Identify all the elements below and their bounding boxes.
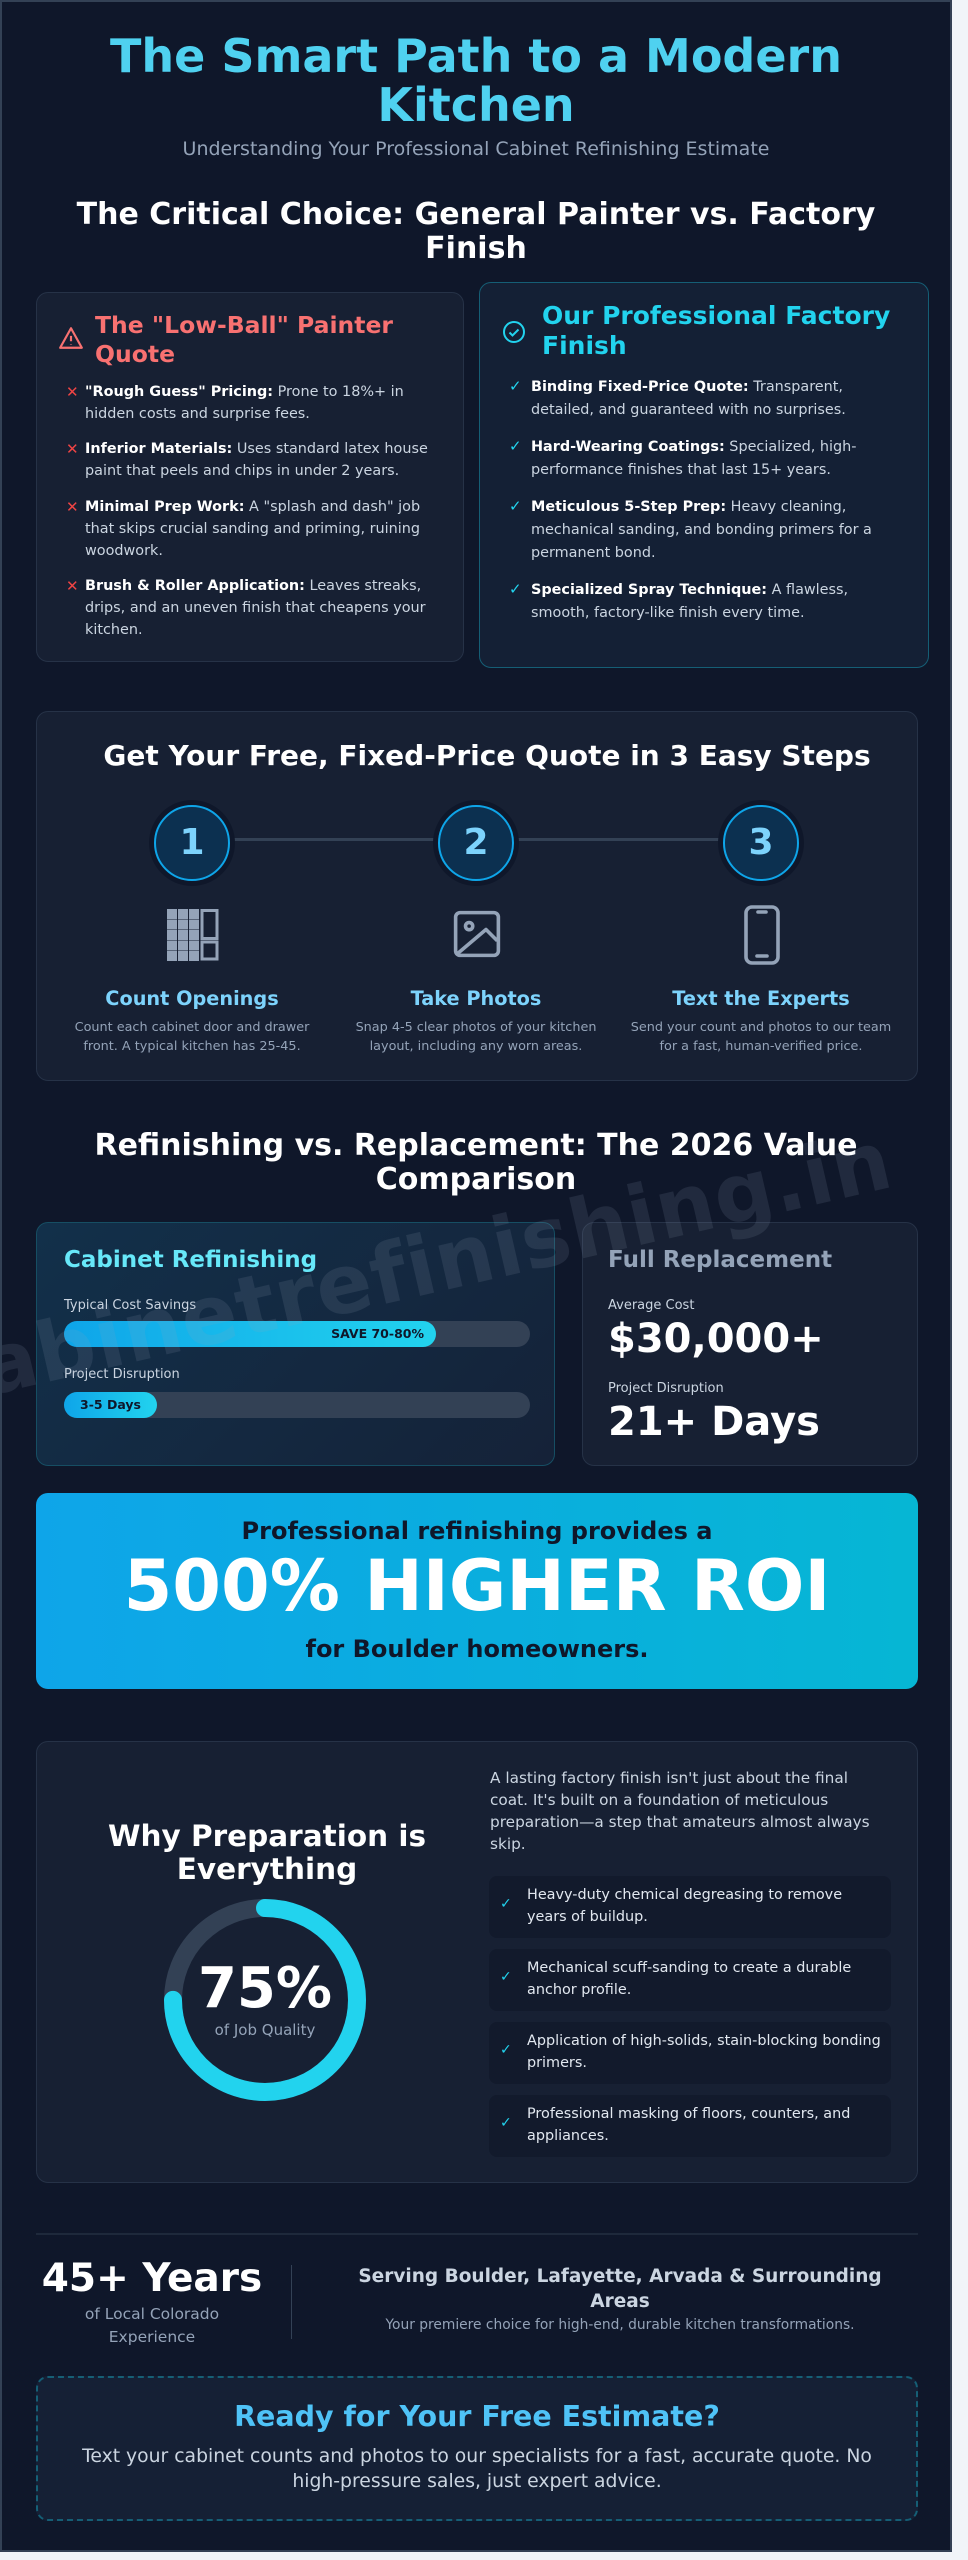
icon: cabinet grid [167, 909, 218, 961]
prep item 3: ✓ [500, 2042, 512, 2058]
prep item 1 [489, 1876, 891, 1938]
list: painter issues: ✕ [66, 498, 79, 516]
stat: 45+ years: 45+ Years [42, 2256, 262, 2301]
list: painter issues: Brush & Roller Application: Leaves streaks, drips, and an uneven finish that cheapens your kitchen. [85, 578, 426, 638]
label: disruption: Project Disruption [608, 1381, 724, 1396]
panel: why preparation [36, 1741, 918, 2183]
label: text the experts: Text the Experts [672, 987, 850, 1010]
step 1 [75, 800, 310, 1054]
donut chart 75%: of Job Quality [215, 2021, 315, 2039]
list: painter issues: ✕ [66, 440, 79, 458]
step 2 [356, 800, 596, 1054]
bar: savings: SAVE 70-80% [331, 1326, 424, 1341]
number circle 1: 1 [179, 822, 205, 863]
title [110, 29, 842, 132]
panel: 3 easy steps [36, 711, 918, 1081]
title: Kitchen [377, 78, 575, 132]
desc: text the experts: Send your count and photos to our team for a fast, human-verified price. [631, 1020, 891, 1054]
heading: preparation [108, 1819, 426, 1886]
heading: value comparison: Comparison [376, 1162, 576, 1197]
label: cost savings: Typical Cost Savings [64, 1298, 196, 1313]
donut chart 75%: 75% [198, 1956, 332, 2021]
bar: disruption: 3-5 Days [80, 1397, 141, 1412]
heading: cabinet refinishing: Cabinet Refinishing [64, 1247, 317, 1273]
number circle 3: 3 [748, 822, 774, 863]
list: factory benefits: ✓ [509, 580, 522, 598]
service area text: Your premiere choice for high-end, durable kitchen transformations. [385, 2317, 855, 2333]
bar: disruption [64, 1392, 530, 1418]
desc: count openings: Count each cabinet door and drawer front. A typical kitchen has 25-45. [75, 1020, 309, 1054]
list: factory benefits [509, 377, 872, 621]
heading: value comparison [94, 1128, 858, 1197]
prep item 3: Application of high-solids, stain-blocking bonding primers. [527, 2033, 881, 2071]
cta text: Text your cabinet counts and photos to our specialists for a fast, accurate quote. No high-pressure sales, just expert advice. [82, 2446, 872, 2492]
panel: cabinet refinishing [36, 1222, 555, 1466]
panel: full replacement [582, 1222, 918, 1466]
list: factory benefits: Hard-Wearing Coatings: Specialized, high-performance finishes that last 15+ years. [531, 439, 856, 478]
number circle 1 [149, 800, 235, 886]
list: painter issues: ✕ [66, 577, 79, 595]
prep item 2: ✓ [500, 1969, 512, 1985]
stat: 45+ years: of Local Colorado [85, 2305, 219, 2323]
label: disruption: Project Disruption [64, 1367, 180, 1382]
callout: free estimate [36, 2376, 918, 2521]
label: count openings: Count Openings [105, 987, 279, 1010]
label: take photos: Take Photos [411, 987, 541, 1010]
icon: warning [59, 327, 83, 349]
number circle 3 [718, 800, 804, 886]
number circle 2 [433, 800, 519, 886]
heading: value comparison: Refinishing vs. Replacement: The 2026 Value [94, 1128, 858, 1163]
stat: 45+ years [42, 2256, 262, 2346]
donut chart 75% [164, 1899, 366, 2101]
list: painter issues [66, 383, 428, 638]
heading: low-ball: The "Low-Ball" Painter Quote [95, 311, 393, 368]
heading: preparation: Why Preparation is [108, 1819, 426, 1853]
icon: phone [744, 905, 780, 965]
desc: take photos: Snap 4-5 clear photos of your kitchen layout, including any worn areas. [356, 1020, 596, 1054]
heading: full replacement: Full Replacement [608, 1247, 832, 1273]
prep item 4 [489, 2095, 891, 2157]
stat: cost: $30,000+ [608, 1316, 824, 1362]
heading: steps: Get Your Free, Fixed-Price Quote in 3 Easy Steps [103, 739, 871, 772]
list: factory benefits: Binding Fixed-Price Quote: Transparent, detailed, and guaranteed with no surprises. [531, 379, 846, 418]
prep item 3 [489, 2022, 891, 2084]
icon: photo [454, 910, 500, 958]
list: painter issues: Inferior Materials: Uses standard latex house paint that peels and chips in under 2 years. [85, 441, 428, 479]
subtitle: Understanding Your Professional Cabinet Refinishing Estimate [183, 138, 769, 160]
list: factory benefits: ✓ [509, 497, 522, 515]
banner stat: 500% HIGHER ROI [124, 1545, 830, 1627]
prep item 1: Heavy-duty chemical degreasing to remove years of buildup. [527, 1887, 842, 1925]
service area text: Serving Boulder, Lafayette, Arvada & Surrounding Areas [358, 2266, 882, 2312]
connector line [194, 838, 764, 841]
banner text bottom: for Boulder homeowners. [306, 1635, 648, 1663]
heading: critical choice: Finish [425, 231, 527, 266]
paragraph: preparation: A lasting factory finish isn't just about the final coat. It's built on a foundation of meticulous preparation—a step that amateurs almost always skip. [490, 1769, 870, 1853]
list: factory benefits: Specialized Spray Technique: A flawless, smooth, factory-like finish every time. [531, 582, 848, 621]
heading: critical choice [76, 197, 875, 266]
title: The Smart Path to a Modern [110, 29, 842, 83]
prep item 2: Mechanical scuff-sanding to create a durable anchor profile. [527, 1960, 851, 1998]
stat: days: 21+ Days [608, 1399, 820, 1445]
banner: ROI [36, 1493, 918, 1689]
banner text top: Professional refinishing provides a [242, 1517, 712, 1545]
list: factory benefits: ✓ [509, 377, 522, 395]
step 3 [631, 800, 891, 1054]
list: factory benefits: Meticulous 5-Step Prep: Heavy cleaning, mechanical sanding, and bonding primers for a permanent bond. [531, 499, 872, 561]
list: painter issues: ✕ [66, 383, 79, 401]
prep item 1: ✓ [500, 1896, 512, 1912]
cta heading: Ready for Your Free Estimate? [234, 2400, 720, 2433]
panel: professional factory finish [479, 282, 929, 668]
service area text [358, 2266, 882, 2333]
prep item 2 [489, 1949, 891, 2011]
label: average cost: Average Cost [608, 1298, 694, 1313]
icon: circle check [503, 321, 525, 343]
list: painter issues: Minimal Prep Work: A "splash and dash" job that skips crucial sanding and priming, ruining woodwork. [85, 499, 420, 559]
stat: 45+ years: Experience [109, 2328, 195, 2346]
heading: factory finish: Our Professional Factory Finish [542, 301, 890, 360]
list: painter issues: "Rough Guess" Pricing: Prone to 18%+ in hidden costs and surprise fees. [85, 384, 404, 422]
prep item 4: Professional masking of floors, counters, and appliances. [527, 2106, 850, 2144]
bar: savings [64, 1321, 530, 1347]
list: factory benefits: ✓ [509, 437, 522, 455]
heading: critical choice: The Critical Choice: General Painter vs. Factory [77, 197, 875, 232]
panel: low-ball painter quote [36, 292, 464, 662]
heading: preparation: Everything [177, 1852, 357, 1886]
number circle 2: 2 [463, 822, 489, 863]
prep item 4: ✓ [500, 2115, 512, 2131]
